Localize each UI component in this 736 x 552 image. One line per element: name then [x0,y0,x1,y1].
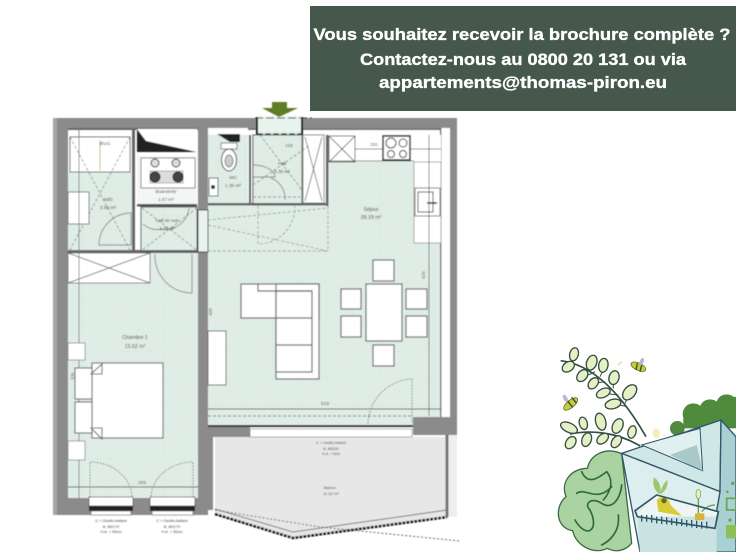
label: bedroom [122,335,148,350]
bush behind building [670,394,736,436]
label: night hall: Hall de nuit [156,218,179,223]
text: brochure contact lines: Contactez-nous au 0800 20 131 ou via [360,51,687,69]
label: living room: 28.19 m² [361,215,382,221]
label: balcony door [316,441,346,456]
label: bedroom: Chambre 1 [122,335,148,341]
labels: bedroom windows: C = Oscillo-battant [156,519,189,523]
label: hall [274,161,291,175]
room: entrance hall: 159 [285,143,293,148]
label: laundry [156,189,177,202]
label: balcony door: H.A. = 5cm [322,452,340,456]
yellow bud [653,428,660,438]
label: hall: Hall [278,161,286,167]
balcony [215,433,460,541]
labels: bedroom windows: B. 80/170 [164,525,180,529]
bed [75,363,163,439]
dining table and chairs [341,260,427,366]
room: entrance hall [253,135,324,205]
door swing: living room [208,206,328,251]
label: bathroom [100,197,117,211]
kitchen [329,135,441,416]
living room dimension and door: 498 [208,308,213,316]
label: bathroom: SdD [103,197,113,203]
plants on balcony [653,477,668,494]
label: laundry: Buanderie [156,189,177,194]
room: bedroom [68,128,198,498]
sofa [241,284,319,379]
labels: bedroom windows: H.A. = 50cm [162,530,182,534]
entrance arrow [262,102,298,117]
label: bathroom: 3.65 m² [100,205,117,211]
label: balcony area [323,485,339,496]
icon: hob [383,136,410,160]
kitchen: 626 [421,271,426,279]
icon: bee right [617,357,647,373]
text: brochure contact lines [314,26,730,92]
room: shower and bathroom [68,137,131,250]
right face windows [727,498,736,510]
room: shower and bathroom: Ø141 [99,141,111,146]
icon: sink [415,188,440,216]
labels: bedroom windows: H.A. = 50cm [100,530,122,534]
bedroom windows [89,497,195,515]
label: WC [225,175,242,189]
labels: bedroom windows: C = Oscillo-battant [95,519,128,523]
upper branch [560,347,646,437]
illustration: green building, plants and bees [558,347,736,552]
room: night hall [141,207,197,252]
label: balcony area: 11.02 m² [323,491,339,496]
label: hall: 3.35 m² [274,169,291,175]
label: bedroom: 15.52 m² [125,344,146,350]
living room dimension and door [208,308,441,437]
label: WC: WC [229,175,238,181]
tree [558,451,632,551]
floor plan [53,102,460,541]
living room dimension and door: 519 [321,401,329,407]
text: brochure contact lines: Vous souhaitez recevoir la brochure complète ? [314,26,730,44]
side table [208,331,226,385]
label: night hall [156,218,179,231]
panel: contact call to action [310,6,736,111]
room: bedroom: 289 [138,480,146,486]
labels: bedroom windows: B. 80/170 [103,525,119,529]
label: WC: 1.35 m² [225,183,242,189]
labels: bedroom windows [95,519,189,534]
room: bedroom: 536 [70,372,75,380]
building [622,420,736,552]
icon: bee left [562,394,580,412]
kitchen: 250 [370,142,378,147]
label: laundry: 1.57 m² [158,197,174,202]
text: brochure contact lines: appartements@thomas-piron.eu [379,74,667,92]
balcony railing [635,495,718,528]
window door swings [90,462,193,497]
label: living room [361,207,382,221]
room: laundry [137,156,197,204]
floors [68,135,441,498]
walls [53,116,457,515]
label: living room: Séjour [364,207,379,213]
lower branch [559,412,640,451]
room: WC [208,128,248,196]
label: balcony door: C = Oscillo-battant [316,441,346,445]
label: balcony door: B. 80/220 [323,447,339,451]
label: night hall: 1.38 m² [159,226,175,231]
room: technical shaft [137,129,197,152]
label: balcony area: Balcon [324,485,336,490]
